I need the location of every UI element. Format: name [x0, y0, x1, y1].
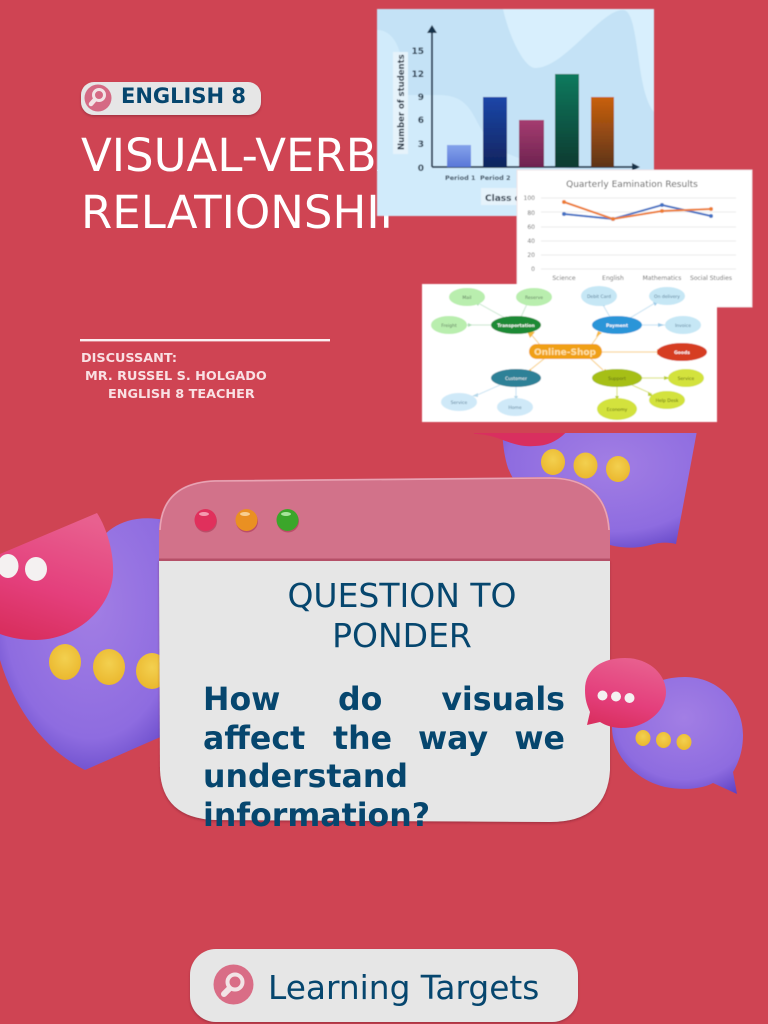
bar chart image [377, 9, 654, 216]
speech bubbles: lower right [585, 658, 743, 794]
map labels [441, 294, 695, 413]
y labels: 20 [527, 252, 535, 259]
y ticks: 9 [418, 93, 424, 103]
discussant block: DISCUSSANT: [81, 351, 177, 366]
map labels: Debit Card [587, 294, 611, 300]
axes [427, 25, 640, 171]
y ticks: 0 [418, 164, 424, 174]
question body: How [203, 682, 280, 718]
question heading: PONDER [332, 616, 472, 655]
question heading [287, 576, 517, 655]
button: Learning Targets [190, 949, 578, 1022]
window buttons [194, 509, 299, 532]
yellow dots [541, 449, 630, 482]
map labels: Service [678, 376, 695, 382]
map nodes [431, 286, 707, 420]
question body: visuals [441, 682, 565, 718]
x labels: Mathematics [643, 275, 681, 282]
map labels: On delivery [654, 294, 680, 300]
chart title: Quarterly Eamination Results [566, 180, 698, 190]
window panel [159, 477, 610, 834]
question body: do [338, 682, 382, 718]
divider [80, 339, 330, 341]
map arrowheads [468, 300, 670, 400]
yellow dots [636, 730, 692, 750]
map labels: Freight [441, 323, 457, 329]
x labels: Science [552, 275, 576, 282]
icon: magnifier [84, 84, 112, 112]
question body: way [418, 721, 489, 757]
window header [159, 477, 610, 561]
y labels: 0 [531, 266, 535, 273]
gridlines [541, 198, 736, 269]
y labels: 100 [524, 195, 535, 202]
speech bubbles: top right [474, 433, 697, 548]
y ticks: 3 [418, 140, 424, 150]
bars [447, 74, 614, 167]
y labels: 80 [527, 210, 535, 217]
x labels: English [602, 275, 624, 282]
map labels: Goods [674, 350, 690, 356]
question body: affect [203, 721, 305, 757]
y ticks: 6 [418, 116, 424, 126]
title line 2: RELATIONSHIP [81, 186, 407, 239]
question body: understand [203, 759, 408, 795]
question body: information? [203, 798, 430, 834]
badge: English 8 [81, 82, 261, 115]
map labels: Service [451, 400, 468, 406]
x axis title [481, 188, 531, 205]
question body: we [514, 721, 565, 757]
x labels [445, 174, 511, 182]
pink bubble [585, 658, 666, 728]
yellow dots [49, 644, 168, 689]
y ticks: 15 [411, 47, 424, 57]
badge: English 8: ENGLISH 8 [121, 84, 246, 108]
map labels: Customer [505, 376, 527, 382]
discussant block: MR. RUSSEL S. HOLGADO [85, 369, 267, 384]
map labels: Transportation [497, 323, 535, 329]
line chart image [517, 170, 752, 307]
x labels [552, 275, 732, 282]
icon: magnifier [214, 964, 254, 1004]
orange series [562, 200, 713, 221]
x labels: Social Studies [690, 275, 732, 282]
mind map image [422, 284, 717, 422]
question body: the [333, 721, 392, 757]
discussant block [81, 351, 267, 402]
y axis label: Number of students [397, 54, 407, 150]
map labels: Home [508, 405, 522, 411]
y axis label [393, 52, 408, 154]
x axis title: Class c [485, 194, 520, 204]
button: Learning Targets: Learning Targets [268, 969, 539, 1007]
map labels: Payment [606, 323, 629, 329]
title: VISUAL-VERBAL [81, 129, 432, 182]
y ticks [411, 47, 424, 174]
question heading: QUESTION TO [287, 576, 517, 615]
y labels [524, 195, 535, 273]
map labels: Reserve [525, 295, 543, 301]
blue series [562, 203, 713, 221]
map labels: Support [608, 376, 626, 382]
map labels: Mail [462, 295, 472, 301]
map center label: Online-Shop [534, 348, 597, 358]
speech bubbles: left [0, 513, 168, 770]
question body [203, 682, 565, 834]
white dots [0, 554, 47, 581]
x labels: Period 2 [480, 174, 511, 182]
map labels: Invoice [675, 323, 691, 329]
y ticks: 12 [411, 70, 424, 80]
x labels: Period 1 [445, 174, 476, 182]
map labels: Help Desk [656, 398, 679, 404]
discussant block: ENGLISH 8 TEACHER [108, 387, 255, 402]
y labels: 60 [527, 224, 535, 231]
map labels: Economy [607, 407, 628, 413]
connectors [467, 303, 668, 398]
y labels: 40 [527, 238, 535, 245]
